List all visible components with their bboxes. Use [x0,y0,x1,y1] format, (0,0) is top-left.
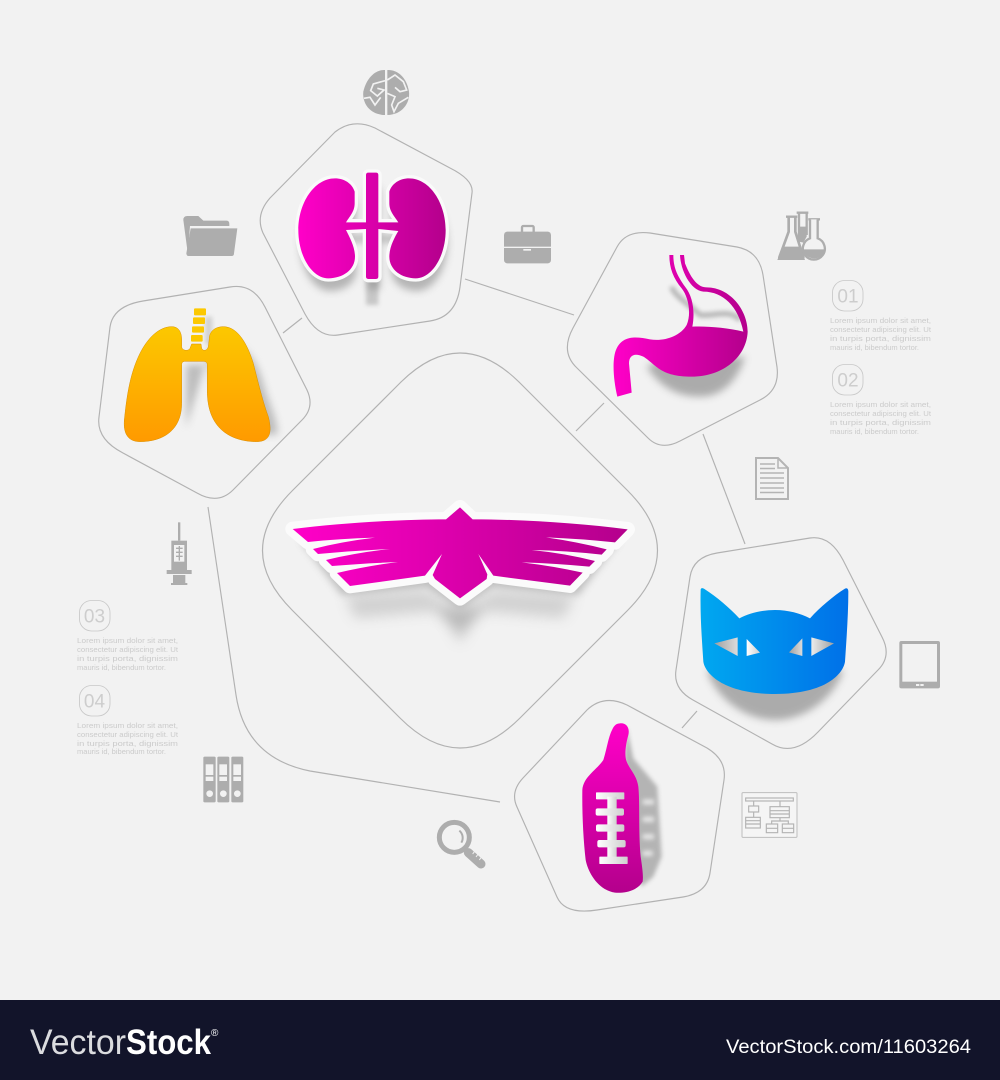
panel: bottle pentagon outline [515,701,724,911]
text block 04: in turpis porta, dignissim [77,739,178,748]
sticker: bottle [582,723,662,893]
footer logo: ® [211,1028,219,1039]
text block 02: consectetur adipiscing elit. Ut [830,409,931,418]
text block 02: 02 [837,370,859,392]
text block 02: in turpis porta, dignissim [830,418,931,427]
text block 01: Lorem ipsum dolor sit amet, [830,316,931,325]
sticker: stomach [614,255,748,397]
text block 02: mauris id, bibendum tortor. [830,427,919,436]
text block 01: consectetur adipiscing elit. Ut [830,325,931,334]
icon: magnifier [439,822,481,864]
text block 03 [77,600,178,672]
text block 02: Lorem ipsum dolor sit amet, [830,400,931,409]
footer logo: Vector [30,1023,126,1062]
text block 03: 03 [84,606,105,628]
footer bar [0,1000,1000,1080]
text block 03: Lorem ipsum dolor sit amet, [77,636,178,645]
icon: flowchart [742,793,797,837]
icon: briefcase [504,226,551,263]
text block 02 [830,364,931,436]
text block 04 [77,686,178,756]
icon: binders [203,757,243,802]
text block 03: mauris id, bibendum tortor. [77,663,166,672]
sticker: wings emblem [293,507,628,643]
text block 03: consectetur adipiscing elit. Ut [77,645,178,654]
sticker: lungs [124,308,278,442]
footer logo [30,1023,219,1062]
text block 01: mauris id, bibendum tortor. [830,343,919,352]
text block 03: in turpis porta, dignissim [77,654,178,663]
footer logo: Stock [126,1023,211,1062]
text block 01: 01 [837,286,859,308]
connector lines [208,279,745,802]
text block 04: 04 [84,692,105,712]
panel: kidney pentagon outline [260,124,472,335]
sticker: cat mask [701,588,848,720]
panel: cat mask pentagon outline [676,538,886,748]
panel: center diamond outline [262,353,658,748]
icon: document [756,458,788,499]
text block 04: consectetur adipiscing elit. Ut [77,730,178,739]
text block 04: mauris id, bibendum tortor. [77,747,166,756]
footer image id: VectorStock.com/11603264 [726,1036,971,1058]
text block 04: Lorem ipsum dolor sit amet, [77,721,178,730]
icon: folder [183,216,237,256]
text block 01 [830,280,931,352]
icon: syringe [167,522,192,585]
panel: stomach pentagon outline [567,233,777,445]
icon: brain [363,70,409,115]
panel: lung pentagon outline [99,286,310,498]
sticker: kidneys [298,173,447,305]
icon: tablet [899,641,940,688]
text block 01: in turpis porta, dignissim [830,334,931,343]
icon: lab flasks [777,213,825,260]
